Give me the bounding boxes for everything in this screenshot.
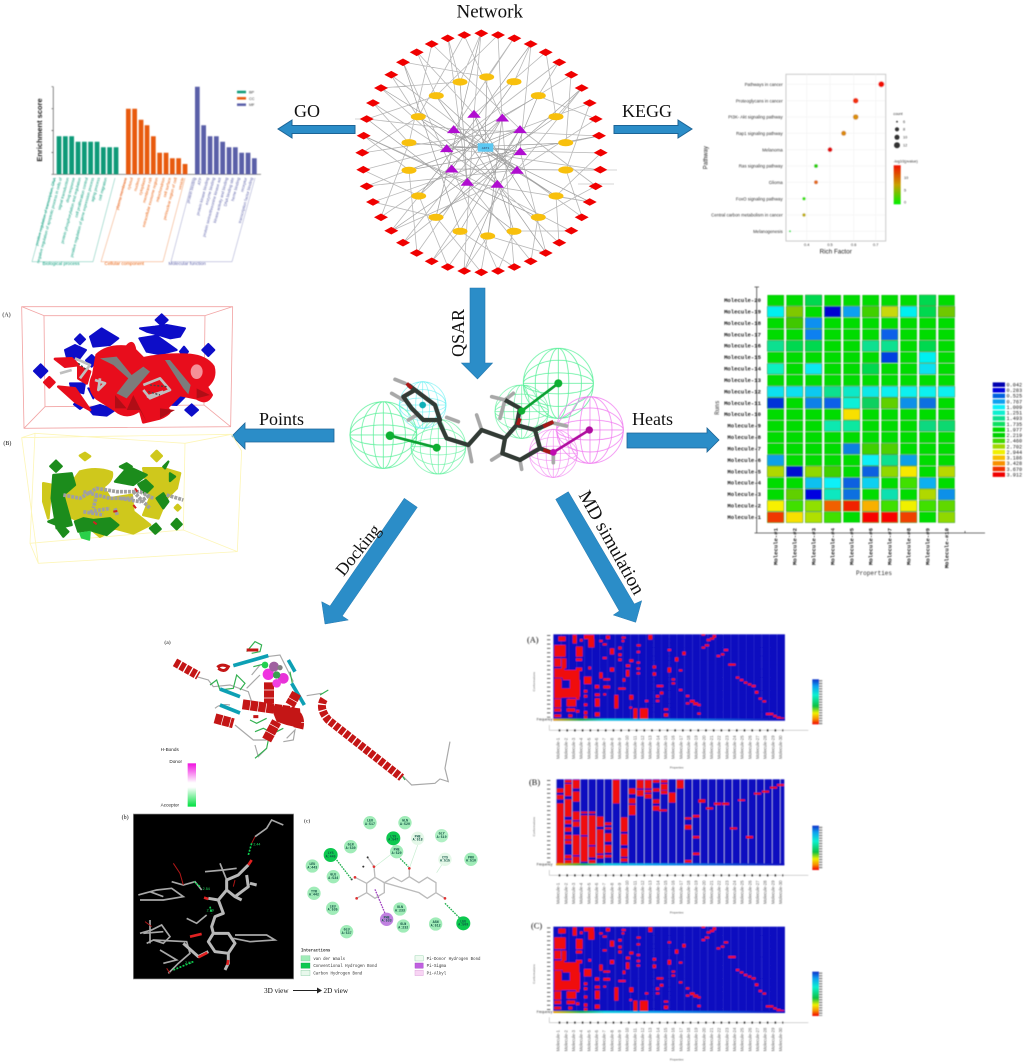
heatmap legend: 3.428 (1006, 461, 1022, 467)
GO legend: MF (249, 103, 255, 107)
axes and labels (532, 780, 808, 914)
core mass (270, 705, 302, 728)
GO boxes 3 (171, 178, 255, 262)
residues: TYR (311, 889, 317, 893)
central pharmacophore model (350, 348, 623, 477)
Points panel B: steric field (3, 433, 242, 563)
interactions legend: van der Waals (313, 957, 346, 962)
frequency strip (556, 863, 784, 865)
KEGG pathway labels: Proteoglycans in cancer (736, 98, 783, 103)
heatmap legend: 2.460 (1006, 439, 1022, 445)
title: Network: Network (456, 2, 523, 22)
GO legend (237, 90, 255, 107)
yellow bounding box (22, 433, 242, 563)
hydrogen bonds (173, 843, 252, 970)
KEGG pathway labels: Ras signaling pathway (739, 164, 783, 169)
residues: A:517 (365, 822, 375, 826)
molecule heteroatoms (93, 488, 137, 524)
heatmap row labels: Molecule-2 (727, 503, 762, 510)
color legend (812, 679, 821, 724)
MD heatmap C (531, 921, 821, 1062)
3D view to 2D view caption: 2D view (324, 987, 349, 995)
H-bonds legend: H-Bonds (161, 747, 179, 752)
GO molecular function term labels: enzyme binding (204, 177, 216, 205)
interactions legend: Interactions (301, 948, 331, 953)
GO biological process term labels: negative regulation of apoptotic process in cells of (35, 176, 63, 264)
blue matrix (553, 927, 785, 1013)
residues: A:443 (307, 865, 317, 869)
thin grey residues (138, 820, 283, 973)
heatmap row labels: Molecule-6 (727, 457, 762, 464)
green acceptor vectors (386, 379, 562, 452)
GO molecular function term labels: transcription factor binding (237, 177, 254, 224)
molecule stick shade (78, 363, 167, 395)
heatmap row labels: Molecule-13 (724, 377, 762, 384)
residues: A:509 (458, 923, 468, 927)
docking panel a: protein structure (161, 639, 450, 807)
GO molecular function term labels: protein binding (185, 177, 197, 204)
arrow: KEGG (614, 120, 692, 138)
panel label b: (b) (122, 814, 129, 821)
interactions legend (301, 948, 481, 976)
ligand atoms (351, 856, 446, 900)
docking panel c: 2D interaction map (301, 816, 481, 976)
residues: A:520 (400, 822, 410, 826)
heatmap legend: 2.944 (1006, 450, 1022, 456)
oxygen atoms (407, 383, 553, 452)
KEGG x ticks: 0.4 (804, 243, 809, 247)
panel label B: (B) (3, 440, 11, 447)
KEGG x ticks: 0.6 (851, 243, 856, 247)
axes and labels (532, 635, 808, 769)
residues: LEU (309, 862, 315, 866)
core helices (215, 682, 299, 740)
cyan ring center (419, 402, 426, 408)
bond distances: 2.54 (203, 887, 210, 891)
GO molecular function term labels: DNA binding site (222, 176, 235, 207)
residues: LEU (367, 819, 373, 823)
KEGG count legend (893, 112, 907, 148)
heatmap axis titles (714, 400, 892, 577)
GO group labels: Biological process (42, 261, 80, 266)
GO group labels (42, 261, 206, 266)
heatmap row labels: Molecule-20 (724, 297, 762, 304)
heatmap legend (993, 382, 1022, 478)
heatmap row labels: Molecule-7 (727, 446, 761, 452)
cyan mesh sphere (399, 382, 446, 428)
label: GO: GO (294, 101, 320, 121)
KEGG color legend: 0 (904, 200, 906, 204)
coil loops green (210, 642, 405, 780)
molecule skeleton (403, 385, 553, 460)
interactions legend: Pi-Sigma (427, 964, 447, 969)
panel label a: (a) (164, 639, 171, 646)
hydrogen bond lines (337, 857, 460, 918)
residues: ASN (433, 920, 439, 924)
KEGG pathway labels (711, 82, 784, 234)
heatmap legend: 2.219 (1006, 433, 1022, 439)
GO biological process term labels: positive regulation of gene expression process (69, 177, 95, 258)
GO y label: Enrichment score (35, 98, 44, 162)
top helix (175, 662, 198, 676)
arrow: Heats (627, 428, 719, 452)
residues: LYS (328, 851, 334, 855)
label: Heats: Heats (632, 409, 673, 429)
heatmap row labels: Molecule-12 (724, 388, 762, 395)
GO biological process term labels: protein phosphorylation and regulation (60, 177, 82, 244)
heatmap legend: 1.251 (1006, 411, 1022, 417)
GO molecular function term labels: heme binding (230, 177, 241, 201)
bond distances: 2.99 (207, 909, 214, 913)
label: Points: Points (259, 409, 304, 429)
label: KEGG: KEGG (622, 101, 672, 121)
heatmap row labels: Molecule-1 (727, 514, 762, 521)
panel label c: (c) (304, 818, 310, 825)
GO legend: CC (249, 97, 255, 101)
heatmap row labels: Molecule-15 (724, 354, 762, 361)
frequency strip (553, 719, 785, 721)
molecule sticks (63, 488, 183, 515)
heatmap row labels: Molecule-14 (724, 366, 762, 372)
residues (306, 816, 478, 938)
heatmap row labels: Molecule-4 (727, 480, 762, 487)
GO cellular component bars (126, 109, 187, 174)
KEGG count legend: 10 (903, 136, 907, 140)
MD heatmap B (529, 778, 821, 914)
residues: LEU (460, 919, 466, 923)
interactions legend: Pi-Donor Hydrogen Bond (427, 957, 481, 962)
heatmap row labels (724, 297, 762, 521)
GO biological process term labels: cell migration (97, 177, 108, 201)
interactions legend: Pi-Alkyl (427, 971, 447, 976)
residues: LEU (330, 904, 336, 908)
residues: PHE (415, 834, 421, 838)
heatmap legend: 1.009 (1006, 405, 1022, 411)
panel label A: (A) (2, 311, 11, 318)
GO cellular component term labels: nucleus (133, 177, 141, 192)
ligand skeleton (355, 857, 445, 898)
heatmap legend: 3.912 (1006, 472, 1022, 478)
GO legend: BP (249, 90, 255, 94)
heatmap column labels: Molecule-#7 (886, 528, 894, 565)
heatmap colored cells (767, 295, 955, 523)
grey surface (100, 357, 191, 398)
panel label C: (C) (531, 921, 542, 930)
green contours (48, 461, 182, 537)
KEGG x ticks: 0.7 (873, 243, 878, 247)
KEGG pathway labels: Melanogenesis (753, 229, 783, 234)
KEGG count legend: 12 (903, 144, 907, 148)
heatmap legend: 1.735 (1006, 422, 1022, 428)
GO biological process bars (57, 136, 118, 174)
red contours (44, 343, 214, 422)
label: MD simulation: MD simulation (574, 487, 649, 599)
axes and labels (532, 927, 808, 1062)
heatmap column labels: Molecule-#4 (830, 527, 836, 565)
arrow: GO (278, 120, 355, 138)
teal strands (220, 656, 304, 713)
heatmap column labels: Molecule-#1 (772, 527, 780, 565)
yellow gene nodes (402, 73, 573, 240)
blue contours (34, 314, 214, 416)
3D view to 2D view caption: 3D view (264, 987, 289, 995)
bond distances: 2.97 (185, 961, 192, 965)
heatmap legend: 0.767 (1006, 399, 1022, 405)
GO molecular function term labels: kinase activity and binding (212, 177, 229, 223)
hydrogen caps (392, 379, 567, 469)
faint contact lines (375, 843, 445, 873)
residues: A:233 (395, 908, 405, 912)
residues: A:519 (437, 835, 447, 839)
heatmap column labels: Molecule-#6 (868, 527, 874, 565)
residues: A:535 (328, 908, 338, 912)
GO molecular function term labels: protein kinase binding (195, 177, 210, 216)
GO cellular component term labels (115, 176, 185, 228)
KEGG plot frame (786, 74, 886, 241)
heatmap legend: 2.702 (1006, 444, 1022, 450)
H-bonds legend: Acceptor (161, 802, 179, 807)
KEGG color legend (894, 160, 919, 204)
3D view to 2D view caption (264, 987, 349, 995)
heatmap row labels: Molecule-17 (724, 331, 761, 338)
residues: A:442 (309, 893, 319, 897)
heatmap row labels: Molecule-10 (724, 411, 762, 418)
KEGG pathway labels: Pathways in cancer (745, 82, 783, 87)
heatmap legend: 1.977 (1006, 428, 1022, 434)
heatmap base grid (767, 295, 955, 523)
residues: GLY (439, 832, 445, 836)
GO axes (52, 87, 261, 174)
residues: A:445 (326, 854, 336, 858)
heatmap axes (754, 287, 985, 533)
center node (478, 143, 493, 152)
residues: PHE (384, 915, 390, 919)
GO molecular function bars (195, 87, 257, 174)
magenta mesh spheres (529, 397, 623, 477)
MD heatmap A (527, 634, 821, 769)
KEGG dots (789, 81, 884, 232)
color legend (812, 826, 821, 870)
residues: A:510 (466, 859, 476, 863)
KEGG bubble chart (704, 74, 919, 256)
bright green patches (80, 532, 90, 540)
residues: A:515 (440, 859, 450, 863)
residues: LYS (390, 834, 396, 838)
GO cellular component term labels: vesicle (177, 176, 185, 190)
GO group boxes (32, 178, 115, 262)
H-bonds legend (161, 747, 196, 807)
GO molecular function term labels: ATP (196, 177, 203, 185)
KEGG color legend: 5 (904, 188, 906, 192)
GO molecular function term labels (185, 176, 254, 237)
residues: A:534 (328, 876, 338, 880)
arrow: Points (232, 423, 334, 449)
arrow: Docking (322, 498, 417, 624)
heatmap column labels: Molecule-#3 (810, 527, 818, 565)
coil loops grey (197, 655, 450, 785)
residues: GLU (344, 928, 350, 932)
heatmap column labels: Molecule-#8 (906, 527, 912, 565)
GO group labels: Molecular function (168, 261, 206, 266)
KEGG pathway labels: Glioma (769, 180, 783, 185)
heatmap legend: 3.670 (1006, 467, 1022, 473)
GO cellular component term labels: membrane raft (141, 176, 153, 203)
heatmap row labels: Molecule-3 (727, 491, 762, 498)
color legend (812, 972, 821, 1016)
arrow: MD simulation (556, 492, 642, 622)
GO cellular component term labels: cytoplasm (137, 176, 147, 196)
black background (133, 814, 294, 979)
GO biological process term labels: drug response (65, 176, 76, 203)
KEGG pathway labels: Rap1 signaling pathway (736, 131, 784, 136)
magenta donor vector (550, 426, 593, 456)
residues: GLN (402, 819, 408, 823)
ligand oxygens (190, 860, 252, 965)
panel label B: (B) (529, 778, 540, 787)
KEGG pathway labels: Central carbon metabolism in cancer (711, 213, 783, 218)
GO boxes 2 (101, 178, 185, 262)
heatmap axis titles: Properties (856, 570, 892, 577)
KEGG pathway labels: Melanoma (762, 147, 783, 152)
interactions legend: Carbon Hydrogen Bond (313, 971, 363, 976)
small helices rings (217, 650, 258, 717)
heatmap legend: 0.283 (1006, 388, 1022, 394)
KEGG x ticks (804, 243, 878, 247)
GO molecular function term labels: receptor (239, 176, 248, 192)
dark red and blue thin bonds (145, 837, 255, 973)
heatmap column labels: Molecule-#9 (924, 527, 932, 565)
panel label A: (A) (527, 635, 539, 644)
pi sigma line (375, 889, 385, 913)
KEGG count legend: 6 (903, 120, 905, 124)
residues: PHE (394, 848, 400, 852)
occupancy cells (554, 634, 784, 720)
heatmap axis titles: Runs (714, 400, 721, 415)
H-bonds legend: Donor (169, 759, 182, 764)
ligand spheres (262, 662, 289, 688)
green mesh spheres (350, 348, 593, 474)
molecule sticks (60, 358, 170, 398)
heatmap row labels: Molecule-5 (727, 468, 762, 475)
residues: A:529 (392, 851, 402, 855)
yellow contours (43, 451, 180, 537)
KEGG y axis title: Pathway (704, 146, 710, 169)
interactions legend: Conventional Hydrogen Bond (313, 964, 377, 969)
blue matrix (556, 779, 784, 865)
residues: GLN (397, 905, 403, 909)
label: Docking: Docking (331, 520, 385, 580)
GO biological process term labels (34, 176, 108, 264)
heatmap legend: 3.186 (1006, 456, 1022, 462)
KEGG x ticks: 0.5 (827, 243, 833, 247)
GO biological process term labels: aging process (90, 177, 101, 202)
GO biological process term labels: cell proliferation control (73, 177, 89, 218)
GO biological process term labels: positive regulation of transcription, DNA (34, 177, 57, 246)
blue matrix (553, 634, 785, 721)
Points panel A: electrostatic field (2, 307, 233, 428)
GO enrichment bar chart (32, 87, 261, 266)
residues: A:530 (346, 846, 356, 850)
residues: A:512 (431, 923, 441, 927)
GO biological process term labels: signal transduction (57, 177, 70, 210)
residues: A:547 (388, 838, 398, 842)
network diagram (355, 30, 617, 276)
heatmap column labels: Molecule-#10 (944, 527, 950, 568)
GO cellular component term labels: extracellular exosome region (141, 177, 159, 228)
heatmap legend: 1.493 (1006, 416, 1022, 422)
residues: A:518 (413, 838, 423, 842)
heatmap row labels: Molecule-18 (724, 320, 762, 327)
KEGG color legend: -log10(pvalue) (894, 160, 919, 164)
label: QSAR: QSAR (448, 309, 468, 357)
GO cellular component term labels: plasma membrane (115, 176, 128, 210)
residues: A:533 (382, 919, 392, 923)
docking panel b: 3D view (122, 814, 294, 979)
frequency strip (553, 1011, 785, 1013)
heatmap row labels: Molecule-19 (724, 308, 762, 315)
KEGG pathway labels: FoxO signaling pathway (736, 196, 784, 201)
heatmap row labels: Molecule-11 (724, 400, 762, 407)
heatmap legend: 0.525 (1006, 394, 1022, 400)
heatmap row labels: Molecule-9 (727, 423, 762, 430)
KEGG pathway labels: PI3K- Akt signaling pathway (728, 115, 783, 120)
residues: A:232 (398, 925, 408, 929)
red diamond nodes (355, 30, 608, 276)
GO cellular component term labels: cell surface (162, 176, 172, 198)
heatmap column labels (772, 527, 950, 568)
heatmap row labels: Molecule-8 (727, 434, 762, 441)
occupancy cells (557, 780, 784, 865)
long helix (322, 699, 402, 778)
KEGG count legend: count (893, 112, 904, 116)
GO cellular component term labels: perinuclear region of cell (162, 177, 178, 220)
bond distances (185, 843, 260, 965)
residues: GLU (330, 873, 336, 877)
residues: A:537 (342, 931, 352, 935)
GO molecular function term labels: protein serine/threonine kinase act (201, 176, 222, 237)
residues: PRO (468, 855, 474, 859)
KEGG count legend: 8 (903, 128, 905, 132)
dark red shading (115, 388, 210, 422)
heatmap column labels: Molecule-#2 (792, 527, 798, 565)
heatmap row labels: Molecule-16 (724, 343, 762, 350)
bond distances: 2.44 (253, 843, 260, 847)
GO cellular component term labels: mitochondrion (155, 177, 166, 203)
arrow: QSAR (462, 288, 492, 379)
residues: GLN (348, 843, 354, 847)
main ligand sticks (183, 865, 257, 970)
purple triangle nodes (440, 110, 527, 188)
center node: AKT1 (482, 146, 490, 150)
KEGG color legend: 10 (904, 176, 908, 180)
red bounding box (22, 307, 233, 428)
occupancy cells (554, 927, 784, 1012)
GO cellular component term labels: cytosol (126, 177, 134, 190)
highlight (191, 364, 203, 379)
GO group labels: Cellular component (104, 261, 145, 266)
property heatmap (714, 287, 1022, 577)
residues: CYS (442, 855, 448, 859)
heatmap column labels: Molecule-#5 (848, 527, 856, 565)
residues: GLN (400, 922, 406, 926)
heatmap legend: 0.042 (1006, 382, 1022, 388)
KEGG x axis title: Rich Factor (820, 248, 852, 256)
